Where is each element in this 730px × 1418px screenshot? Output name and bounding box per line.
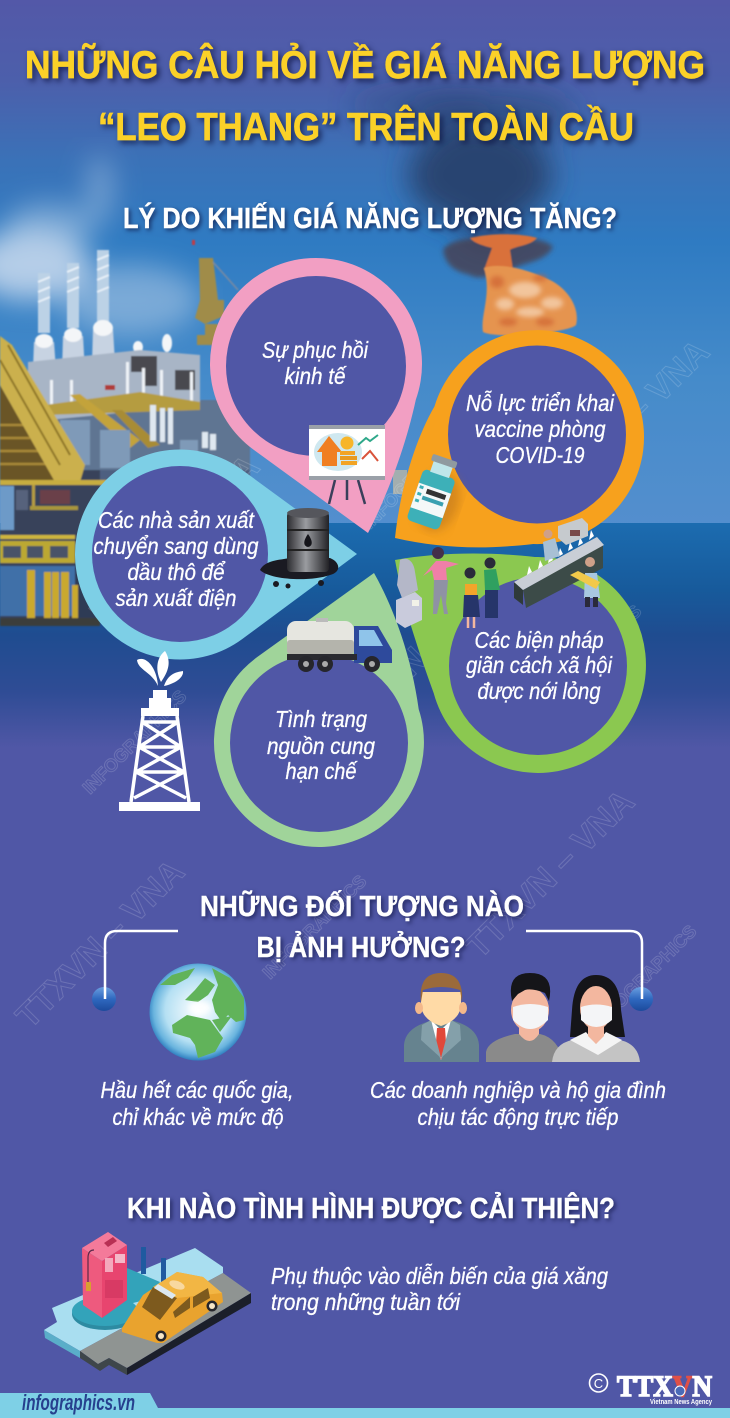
heading: reasons: LÝ DO KHIẾN GIÁ NĂNG LƯỢNG TĂNG? [123,201,617,235]
watermarks: TTXVN – VNA [534,332,717,516]
text: depends on fuel prices: Phụ thuộc vào diễn biến của giá xăng [271,1262,608,1289]
drop: switch to crude oil [75,449,357,660]
heading: when will it improve: KHI NÀO TÌNH HÌNH ĐƯỢC CẢI THIỆN? [127,1191,615,1225]
icon: businessman [404,973,479,1062]
watermarks [9,332,717,1036]
drop: vaccine rollout: vaccine phòng [474,416,606,442]
watermarks: INFOGRAPHICS [359,421,470,533]
watermarks: INFOGRAPHICS [589,921,700,1033]
main yellow beam [0,385,55,480]
drop: economic recovery [210,258,422,533]
refinery platform [0,240,250,626]
drop: switch to crude oil: dầu thô để [128,559,226,585]
icon: fuel tanker truck [287,618,392,672]
lower decks [0,480,112,485]
drop: switch to crude oil: chuyển sang dùng [94,533,259,559]
text: countries [100,1077,294,1130]
watermarks: INFOGRAPHICS [259,871,370,983]
watermarks: TTXVN – VNA [269,622,452,806]
title: “LEO THANG” TRÊN TOÀN CẦU [98,105,634,149]
text: depends on fuel prices [271,1262,608,1315]
watermarks: TTXVN – VNA [84,447,267,631]
drop: social distancing eased: Các biện pháp [474,627,604,653]
crane [195,258,224,345]
logo: TTXVN: Vietnam News Agency [650,1399,712,1406]
heading: who is affected [200,889,524,964]
drop: economic recovery: Sự phục hồi [262,337,369,363]
drop: vaccine rollout: Nỗ lực triển khai [466,389,615,416]
illustration: people and statue [396,547,500,628]
icon: oil derrick [119,651,200,811]
connector right [526,931,653,1011]
flare stacks [38,250,109,333]
drop: social distancing eased: giãn cách xã hội [466,652,613,678]
drop: limited supply: Tình trạng [275,706,367,732]
text: depends on fuel prices: trong những tuần tới [271,1289,461,1315]
watermarks: INFOGRAPHICS [79,686,190,798]
drop: limited supply: hạn chế [286,758,358,784]
drop: switch to crude oil: sản xuất điện [116,585,236,611]
drop: switch to crude oil: Các nhà sản xuất [98,507,255,533]
footer band: infographics.vn [22,1390,135,1415]
drop: economic recovery: kinh tế [284,363,347,389]
text: businesses and households: chịu tác động trực tiếp [418,1104,619,1130]
logo: TTXVN: TTXVN [617,1370,712,1403]
drop: limited supply: nguồn cung [267,733,375,759]
logo: TTXVN: C [594,1376,603,1391]
text: countries: chỉ khác về mức độ [112,1104,284,1130]
icon: globe [150,964,246,1060]
watermarks: TTXVN – VNA [9,852,192,1036]
watermarks: TTXVN – VNA [459,782,642,966]
text: countries: Hầu hết các quốc gia, [100,1077,294,1103]
drop: social distancing eased [395,554,646,773]
icon: masked woman [552,975,640,1062]
icon: masked man [486,973,564,1062]
footer band [0,1390,730,1418]
drop: limited supply [214,573,424,847]
drop: social distancing eased: được nới lỏng [478,678,601,704]
icon: oil barrel and spill [260,508,338,588]
flare flame [443,234,577,335]
title [25,43,705,149]
watermarks: INFOGRAPHICS [534,601,645,713]
small far structure [393,470,407,494]
text: businesses and households: Các doanh nghiệp và hộ gia đình [370,1077,666,1103]
upper deck [28,350,200,422]
illustration: production line [514,518,604,608]
heading: who is affected: BỊ ẢNH HƯỞNG? [256,930,466,964]
illustration: gas pump and car [44,1232,251,1375]
heading: who is affected: NHỮNG ĐỐI TƯỢNG NÀO [200,889,524,923]
icon: vaccine vial [405,452,472,537]
text: businesses and households [370,1077,666,1130]
drop: vaccine rollout: COVID-19 [496,442,585,468]
connector left [92,931,178,1011]
icon: presentation board [309,425,385,504]
drop: vaccine rollout [395,330,644,547]
